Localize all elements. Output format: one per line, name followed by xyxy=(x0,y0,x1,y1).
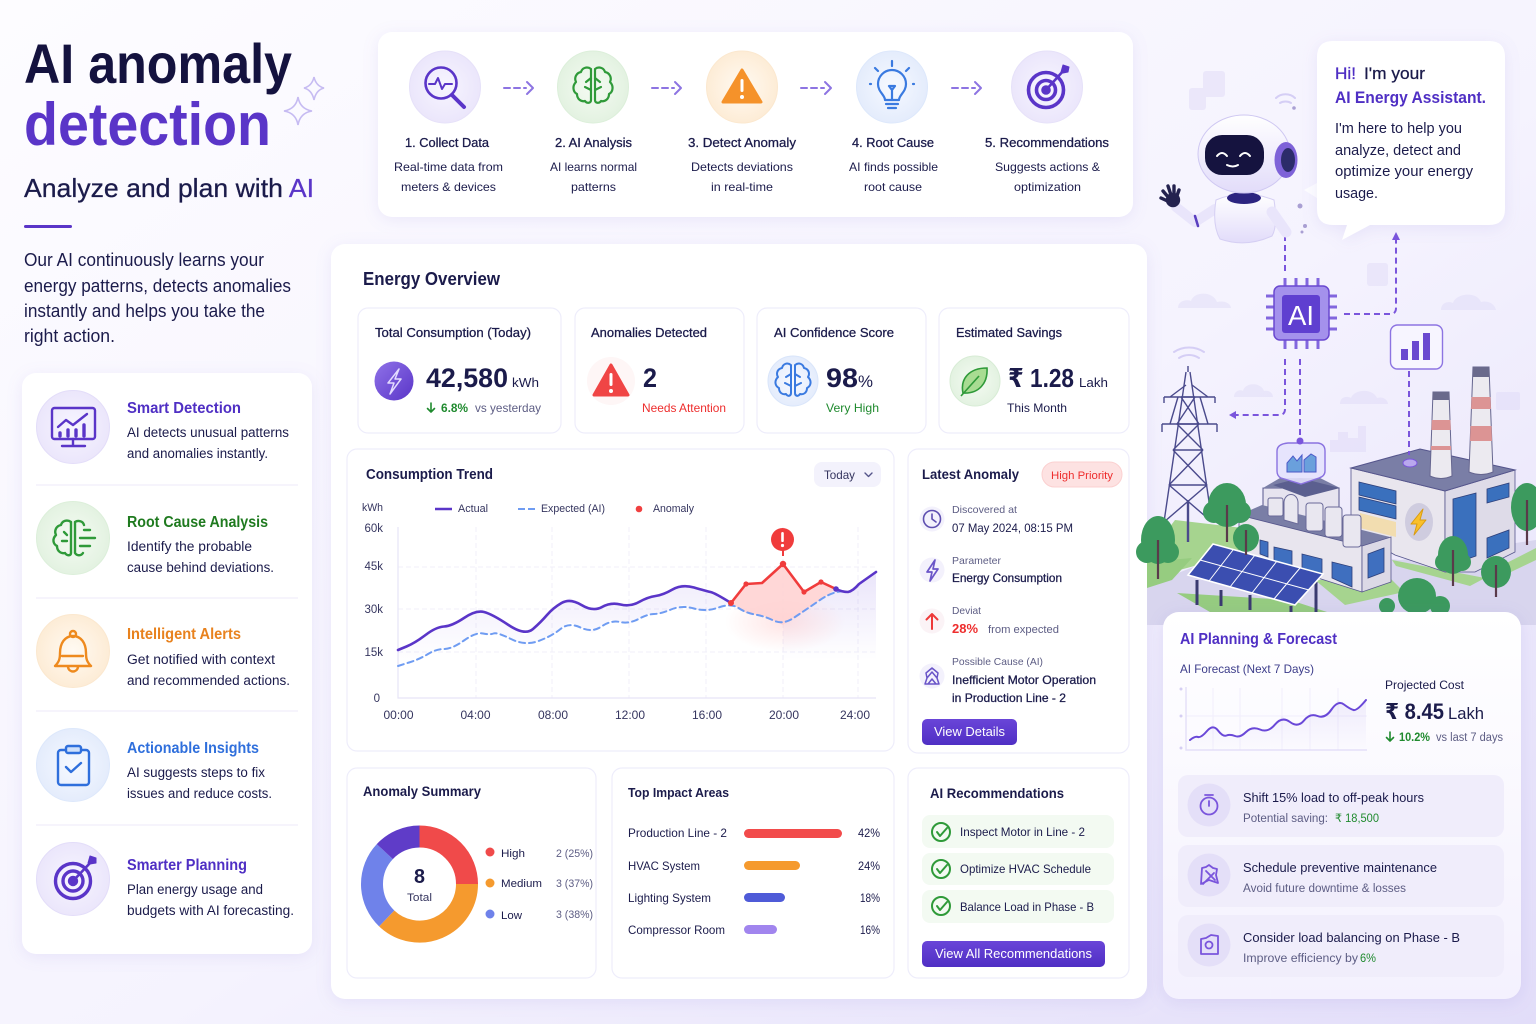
benefit: root cause analysis: Root Cause Analysis xyxy=(127,514,268,531)
x axis labels: 04:00 xyxy=(460,708,491,722)
step 5 recommendations: 5. Recommendations xyxy=(985,136,1109,150)
illustration: solar panel xyxy=(1188,544,1323,612)
kpi: estimated savings: Estimated Savings xyxy=(956,325,1062,340)
step 4 root cause: AI finds possible xyxy=(849,160,938,174)
y axis labels: 15k xyxy=(364,647,383,659)
icon: signal bars badge xyxy=(1390,325,1442,369)
donut chart: 8 xyxy=(414,866,425,888)
chart legend xyxy=(435,503,694,515)
illustration: transmission tower xyxy=(1162,366,1217,542)
icon: blue brain xyxy=(768,356,818,406)
title: detection xyxy=(24,91,271,158)
arrow xyxy=(952,82,981,94)
field: parameter: Energy Consumption xyxy=(952,571,1062,585)
kpi: ai confidence: 98 xyxy=(826,363,858,393)
kpi: total consumption: Total Consumption (Today) xyxy=(375,325,531,340)
donut legend: 3 (37%) xyxy=(556,878,593,890)
forecast line chart xyxy=(1180,687,1367,750)
bar: lighting: 18% xyxy=(860,891,880,905)
x axis labels: 20:00 xyxy=(769,708,799,722)
kpi: anomalies detected xyxy=(575,308,744,433)
panel: process steps xyxy=(378,32,1133,217)
bar: hvac: HVAC System xyxy=(628,859,700,873)
intro paragraph: instantly and helps you take the xyxy=(24,301,265,321)
step 1 collect data xyxy=(394,51,503,194)
step 3 detect anomaly: 3. Detect Anomaly xyxy=(688,136,797,150)
panel: ai planning and forecast: AI Forecast (Next 7 Days) xyxy=(1180,662,1314,676)
field: deviation: from expected xyxy=(988,624,1059,636)
step 1 collect data: 1. Collect Data xyxy=(405,136,489,150)
kpi: ai confidence: Very High xyxy=(826,401,879,415)
donut legend: Medium xyxy=(501,878,542,890)
illustration: ground and paths xyxy=(1147,520,1536,625)
kpi: estimated savings xyxy=(939,308,1129,433)
action: load balancing: 6% xyxy=(1360,953,1376,965)
projected cost: vs last 7 days xyxy=(1436,732,1503,744)
benefit: intelligent alerts: Get notified with context xyxy=(127,652,275,667)
panel: consumption trend: kWh xyxy=(362,502,383,514)
field: deviation xyxy=(920,605,1059,636)
projected cost: ₹ 8.45 xyxy=(1385,699,1444,724)
line chart: consumption xyxy=(398,527,876,698)
action: shift load: Potential saving: xyxy=(1243,813,1328,825)
field: discovered at: 07 May 2024, 08:15 PM xyxy=(952,521,1073,535)
action: load balancing: Improve efficiency by xyxy=(1243,953,1358,965)
step 5 recommendations: optimization xyxy=(1014,180,1081,194)
benefit: actionable insights: Actionable Insights xyxy=(127,740,259,757)
bar: hvac: 24% xyxy=(858,859,880,873)
speech bubble: I'm your xyxy=(1364,65,1426,83)
kpi: ai confidence xyxy=(757,308,926,433)
y axis labels: 60k xyxy=(364,523,383,535)
x axis labels: 08:00 xyxy=(538,708,568,722)
anomaly marker pin xyxy=(771,528,794,556)
speech bubble: AI Energy Assistant. xyxy=(1335,89,1486,107)
bar: production line: 42% xyxy=(858,826,880,840)
speech bubble: usage. xyxy=(1335,186,1378,202)
kpi: estimated savings: This Month xyxy=(1007,401,1067,415)
heading: energy overview: Energy Overview xyxy=(363,269,501,289)
field: discovered at: Discovered at xyxy=(952,504,1017,516)
button: view details: View Details xyxy=(934,725,1005,739)
icon: target xyxy=(1028,65,1069,108)
icon: red alert xyxy=(587,357,635,405)
icon: clipboard xyxy=(58,746,89,785)
item: optimize hvac xyxy=(922,853,1114,885)
chimney one xyxy=(1430,392,1452,478)
speech bubble: I'm here to help you xyxy=(1335,121,1462,137)
step 5 recommendations: Suggests actions & xyxy=(995,160,1100,174)
step 4 root cause: root cause xyxy=(864,180,922,194)
donut legend: 3 (38%) xyxy=(556,909,593,921)
badge: high priority xyxy=(1042,462,1122,487)
benefit: intelligent alerts xyxy=(36,614,290,688)
x axis labels: 12:00 xyxy=(615,708,645,722)
y axis labels: 45k xyxy=(364,561,383,573)
donut legend: Low xyxy=(501,910,522,922)
panel: ai planning and forecast: AI Planning & Forecast xyxy=(1180,631,1338,648)
item: inspect motor xyxy=(922,815,1114,848)
kpi: estimated savings: Lakh xyxy=(1079,375,1108,390)
icon: energy bolt xyxy=(374,362,414,400)
benefit: smart detection xyxy=(36,390,289,464)
intro paragraph xyxy=(24,250,291,346)
benefit: actionable insights xyxy=(36,728,272,802)
item: inspect motor: Inspect Motor in Line - 2 xyxy=(960,825,1085,839)
action: shift load xyxy=(1178,775,1504,837)
benefit: intelligent alerts: Intelligent Alerts xyxy=(127,626,241,643)
benefit: smarter planning: Plan energy usage and xyxy=(127,882,263,897)
step 2 ai analysis xyxy=(550,51,637,194)
projected cost: 10.2% xyxy=(1399,732,1430,744)
step 4 root cause xyxy=(849,51,938,194)
arrow xyxy=(504,82,533,94)
panel: ai recommendations: AI Recommendations xyxy=(930,785,1064,801)
intro paragraph: Our AI continuously learns your xyxy=(24,250,264,270)
icon: monitor chart xyxy=(52,408,95,446)
action: preventive maintenance xyxy=(1178,845,1504,907)
panel: latest anomaly xyxy=(908,449,1129,753)
kpi: estimated savings: ₹ 1.28 xyxy=(1008,363,1074,393)
illustration: faint background icons xyxy=(1178,71,1520,452)
y axis labels xyxy=(364,523,383,705)
item: optimize hvac: Optimize HVAC Schedule xyxy=(960,862,1091,876)
step 2 ai analysis: AI learns normal xyxy=(550,160,637,174)
step 3 detect anomaly xyxy=(688,51,797,194)
step 3 detect anomaly: Detects deviations xyxy=(691,160,793,174)
field: parameter: Parameter xyxy=(952,555,1001,567)
icon: leaf xyxy=(950,356,1000,406)
benefit: smart detection: Smart Detection xyxy=(127,400,241,417)
kpi: total consumption: 42,580 xyxy=(426,363,508,393)
x axis labels xyxy=(383,708,870,722)
benefit: root cause analysis: Identify the probable xyxy=(127,539,252,554)
subtitle: Analyze and plan with AI xyxy=(24,173,314,203)
kpi: ai confidence: % xyxy=(858,372,873,391)
robot ear xyxy=(1274,142,1298,178)
x axis labels: 24:00 xyxy=(840,708,870,722)
field: possible cause: in Production Line - 2 xyxy=(952,691,1066,705)
benefit: root cause analysis: cause behind deviations. xyxy=(127,560,274,575)
projected cost: Projected Cost xyxy=(1385,678,1465,692)
field: discovered at xyxy=(920,504,1073,535)
robot waving hand xyxy=(1161,186,1179,206)
field: possible cause: Inefficient Motor Operation xyxy=(952,673,1096,687)
icon: factory lightning xyxy=(1405,503,1433,541)
illustration: factory with chimneys xyxy=(1351,367,1515,572)
icon: target xyxy=(56,856,96,898)
step 3 detect anomaly: in real-time xyxy=(711,180,773,194)
donut legend: High xyxy=(501,848,525,860)
dropdown: today: Today xyxy=(824,468,855,482)
action: shift load: ₹ 18,500 xyxy=(1335,813,1379,825)
robot head xyxy=(1198,115,1290,193)
kpi: anomalies detected: Anomalies Detected xyxy=(591,325,707,340)
panel: anomaly summary: Anomaly Summary xyxy=(363,783,481,799)
action: load balancing xyxy=(1178,915,1504,977)
arrow xyxy=(652,82,681,94)
bar: compressor: Compressor Room xyxy=(628,923,725,937)
benefit: smart detection: AI detects unusual patterns xyxy=(127,425,289,440)
illustration: small signal dots xyxy=(1292,106,1307,234)
kpi: anomalies detected: 2 xyxy=(643,363,657,393)
icon: ai chip xyxy=(1266,278,1337,349)
illustration: trees xyxy=(1136,483,1536,616)
step 4 root cause: 4. Root Cause xyxy=(852,136,934,150)
kpi: anomalies detected: Needs Attention xyxy=(642,401,726,415)
kpi: total consumption: vs yesterday xyxy=(475,401,541,415)
robot left arm xyxy=(1176,207,1215,226)
bar: lighting: Lighting System xyxy=(628,891,711,905)
benefit: smarter planning: Smarter Planning xyxy=(127,857,247,874)
button: view all recommendations xyxy=(922,941,1105,967)
illustration: faint wifi symbols xyxy=(1174,94,1295,358)
x axis labels: 16:00 xyxy=(692,708,722,722)
illustration: glass hologram cube xyxy=(1273,443,1340,497)
icon: warning triangle xyxy=(723,70,761,102)
button: view all recommendations: View All Recommendations xyxy=(935,947,1092,961)
icon: brain xyxy=(573,68,613,103)
panel: consumption trend xyxy=(347,449,894,751)
title xyxy=(24,32,292,158)
y axis labels: 30k xyxy=(364,604,383,616)
intro paragraph: energy patterns, detects anomalies xyxy=(24,276,291,296)
step 2 ai analysis: patterns xyxy=(571,180,616,194)
icon: sparkles xyxy=(284,77,324,125)
chart legend: Expected (AI) xyxy=(541,503,605,515)
projected cost: Lakh xyxy=(1448,704,1484,723)
kpi: total consumption xyxy=(358,308,561,433)
title: AI anomaly xyxy=(24,32,292,95)
dropdown: today xyxy=(814,462,881,487)
badge: high priority: High Priority xyxy=(1051,470,1114,482)
icon: bell xyxy=(55,631,91,672)
speech bubble xyxy=(1304,41,1505,240)
panel: energy overview xyxy=(331,244,1147,999)
illustration: low building xyxy=(1239,478,1391,592)
speech bubble: analyze, detect and xyxy=(1335,143,1461,159)
item: balance load: Balance Load in Phase - B xyxy=(960,900,1094,914)
kpi: ai confidence: AI Confidence Score xyxy=(774,325,894,340)
robot right arm xyxy=(1272,212,1286,232)
panel: benefits xyxy=(22,373,312,954)
field: deviation: 28% xyxy=(952,622,978,636)
benefit: smart detection: and anomalies instantly. xyxy=(127,446,268,461)
panel: ai recommendations xyxy=(908,768,1129,978)
intro paragraph: right action. xyxy=(24,326,115,346)
action: preventive maintenance: Avoid future downtime & losses xyxy=(1243,883,1406,895)
donut chart xyxy=(372,836,467,932)
kpi: total consumption: kWh xyxy=(512,375,539,390)
panel: anomaly summary xyxy=(347,768,596,978)
donut chart: Total xyxy=(407,892,432,904)
donut legend: 2 (25%) xyxy=(556,848,593,860)
benefit: root cause analysis xyxy=(36,502,274,575)
icon: magnifier pulse xyxy=(426,68,464,107)
robot visor xyxy=(1205,135,1264,175)
icon: brain circuit xyxy=(53,521,95,555)
action: shift load: Shift 15% load to off-peak hours xyxy=(1243,790,1424,805)
item: balance load xyxy=(922,890,1114,923)
bar: compressor: 16% xyxy=(860,923,880,937)
chart legend: Actual xyxy=(458,503,488,515)
benefit: smarter planning xyxy=(36,842,294,918)
bar: production line: Production Line - 2 xyxy=(628,826,727,840)
step 5 recommendations xyxy=(985,51,1109,194)
panel: consumption trend: Consumption Trend xyxy=(366,467,493,483)
action: preventive maintenance: Schedule preventive maintenance xyxy=(1243,860,1437,875)
speech bubble: optimize your energy xyxy=(1335,164,1474,180)
projected cost xyxy=(1385,678,1503,744)
panel: latest anomaly: Latest Anomaly xyxy=(922,466,1019,482)
y axis labels: 0 xyxy=(374,693,380,705)
icon: ai chip: AI xyxy=(1288,300,1314,331)
robot collar xyxy=(1227,192,1261,204)
icon: light bulb xyxy=(870,61,914,108)
action: load balancing: Consider load balancing on Phase - B xyxy=(1243,930,1460,945)
benefit: intelligent alerts: and recommended actions. xyxy=(127,673,290,688)
panel: top impact areas xyxy=(612,768,894,978)
step 2 ai analysis: 2. AI Analysis xyxy=(555,136,632,150)
robot body xyxy=(1215,194,1276,243)
benefit: smarter planning: budgets with AI forecasting. xyxy=(127,903,294,918)
arrow xyxy=(801,82,831,94)
benefit: actionable insights: issues and reduce costs. xyxy=(127,786,272,801)
illustration: connector lines xyxy=(1229,232,1409,455)
chimney two xyxy=(1469,367,1493,474)
field: parameter xyxy=(920,555,1062,585)
donut legend xyxy=(486,848,593,922)
button: view details xyxy=(922,719,1017,745)
field: deviation: Deviat xyxy=(952,605,981,617)
illustration: robot assistant xyxy=(1161,115,1298,243)
bar: lighting xyxy=(628,891,880,905)
panel: ai planning and forecast xyxy=(1163,612,1521,999)
kpi: total consumption: 6.8% xyxy=(441,401,468,415)
step 1 collect data: Real-time data from xyxy=(394,160,503,174)
field: possible cause xyxy=(920,656,1096,705)
chart legend: Anomaly xyxy=(653,503,694,515)
panel: top impact areas: Top Impact Areas xyxy=(628,785,729,800)
bar: hvac xyxy=(628,859,880,873)
bar: compressor xyxy=(628,923,880,937)
x axis labels: 00:00 xyxy=(383,708,414,722)
speech bubble: Hi! xyxy=(1335,65,1356,83)
benefit: actionable insights: AI suggests steps to fix xyxy=(127,765,265,780)
bar: production line xyxy=(628,826,880,840)
step 1 collect data: meters & devices xyxy=(401,180,496,194)
field: possible cause: Possible Cause (AI) xyxy=(952,656,1043,668)
